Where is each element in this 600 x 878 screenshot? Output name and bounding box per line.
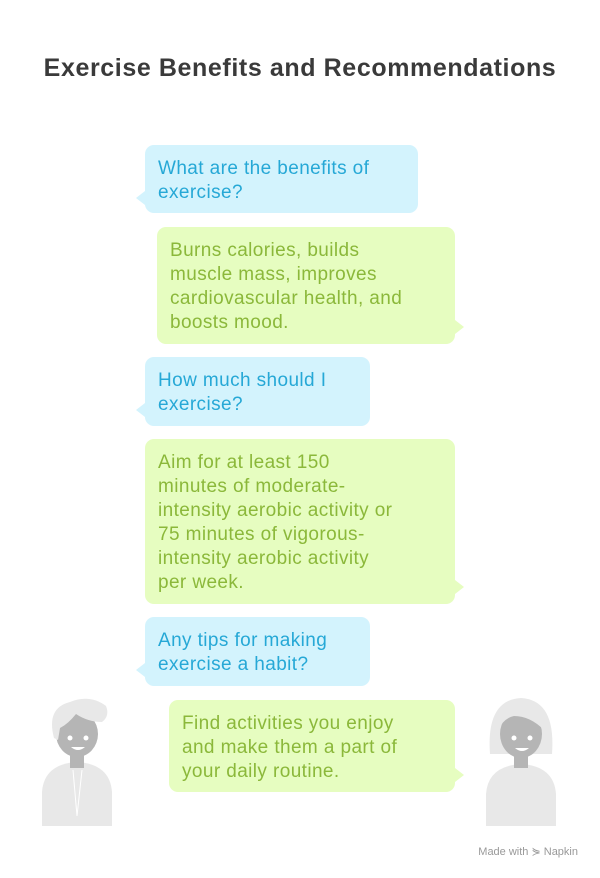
answer bubble 2: intensity aerobic activity or	[158, 500, 392, 521]
question bubble 2: exercise?	[158, 394, 243, 415]
icon: man avatar	[42, 698, 112, 826]
answer bubble 3: and make them a part of	[182, 737, 397, 758]
title: Exercise Benefits and Recommendations	[44, 54, 556, 82]
answer bubble 1: cardiovascular health, and	[170, 288, 402, 309]
question bubble 1: exercise?	[158, 182, 243, 203]
answer bubble 3	[169, 700, 455, 792]
answer bubble 2: per week.	[158, 572, 244, 593]
question bubble 3	[145, 617, 370, 686]
footer credit: Made with ⋟ Napkin	[478, 846, 578, 858]
question bubble 3: exercise a habit?	[158, 654, 308, 675]
icon: woman avatar	[486, 698, 556, 826]
question bubble 3: Any tips for making	[158, 630, 327, 651]
question bubble 1: What are the benefits of	[158, 158, 369, 179]
question bubble 2: How much should I	[158, 370, 326, 391]
answer bubble 2: intensity aerobic activity	[158, 548, 369, 569]
answer bubble 2: Aim for at least 150	[158, 452, 330, 473]
question bubble 1	[145, 145, 418, 213]
answer bubble 2	[145, 439, 455, 604]
answer bubble 1: boosts mood.	[170, 312, 289, 333]
answer bubble 1	[157, 227, 455, 344]
answer bubble 1: Burns calories, builds	[170, 240, 359, 261]
answer bubble 3: Find activities you enjoy	[182, 713, 394, 734]
question bubble 2	[145, 357, 370, 426]
answer bubble 1: muscle mass, improves	[170, 264, 377, 285]
answer bubble 2: 75 minutes of vigorous-	[158, 524, 365, 545]
answer bubble 3: your daily routine.	[182, 761, 340, 782]
answer bubble 2: minutes of moderate-	[158, 476, 346, 497]
